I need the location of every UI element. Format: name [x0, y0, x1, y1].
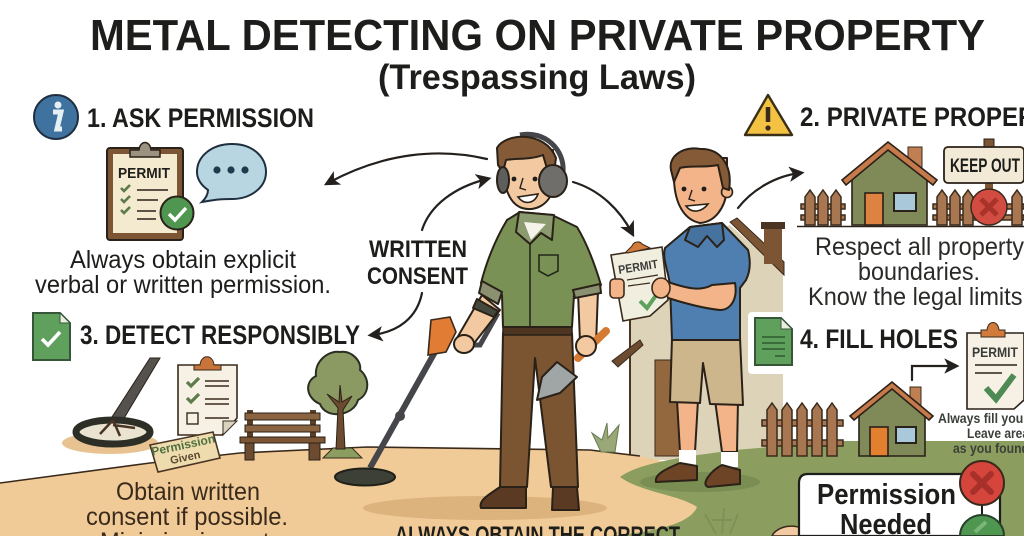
cuff right: [573, 284, 601, 298]
panel: detect responsibly: [33, 313, 367, 536]
icon: permit clipboard: PERMIT: [118, 165, 170, 182]
heading 3: 3. DETECT RESPONSIBLY: [80, 320, 360, 350]
small note text: [938, 411, 1024, 456]
cuff left: [479, 281, 502, 304]
subtitle: (Trespassing Laws): [378, 58, 696, 97]
center callout: written consent: WRITTEN: [369, 236, 467, 263]
stamp: permission given: Permission: [150, 432, 216, 459]
shorts: [670, 338, 743, 405]
icon: green document: [755, 318, 792, 365]
bench: [240, 410, 325, 460]
wristband: [473, 299, 498, 317]
legs: [677, 400, 698, 452]
arm holding detector: [457, 295, 500, 346]
head: [671, 148, 732, 223]
panel: ask permission: [34, 95, 331, 299]
sign: keep out: [944, 139, 1024, 191]
belt: [503, 326, 572, 335]
collar: [516, 212, 554, 244]
ground: grass: [610, 441, 1024, 536]
icon: speech bubble: [197, 144, 266, 202]
arrow to permit: [912, 366, 955, 380]
ground outline: [0, 447, 640, 483]
house: [850, 382, 933, 456]
permit sheet: PERMIT: [972, 344, 1018, 360]
permit clipboard: PERMIT: [617, 257, 660, 277]
text block 3: [86, 478, 288, 536]
stamp: permission given: [150, 432, 220, 472]
ground shadow: [363, 496, 607, 520]
connector line: [981, 505, 983, 516]
fence right: [933, 190, 1024, 225]
ground line: [797, 226, 1024, 228]
fence: [762, 403, 843, 456]
grass tuft: [592, 423, 619, 452]
trowel: [537, 331, 606, 400]
background house: [630, 218, 808, 460]
hand: [454, 335, 474, 353]
checklist document: [178, 357, 237, 435]
icon: permit clipboard: [107, 142, 194, 240]
icon: green check circle: [960, 515, 1004, 536]
head: [497, 134, 567, 209]
text block 2: boundaries.: [858, 258, 980, 286]
stamp: permission given: Given: [169, 449, 202, 467]
text block 2: [808, 233, 1024, 311]
icon: info: [34, 95, 78, 139]
figure: detectorist: [335, 134, 606, 510]
pants: [500, 333, 578, 487]
icon: red X circle: [960, 461, 1004, 505]
fence left: [801, 190, 845, 225]
callout: permission needed: [799, 474, 1000, 536]
arm holding trowel: [578, 290, 598, 345]
arrow: to ask permission: [328, 153, 487, 183]
shirt details: [530, 240, 558, 326]
hand: [772, 526, 810, 536]
permit sheet: [967, 322, 1024, 409]
panel: private property: [745, 95, 1024, 311]
icon: warning triangle: [745, 95, 792, 135]
text block 1: verbal or written permission.: [35, 271, 331, 299]
text block 3: consent if possible.: [86, 503, 288, 531]
figure: landowner: [610, 148, 750, 487]
arrow: to detector's head: [422, 179, 487, 230]
center callout: written consent: [367, 236, 468, 290]
icon: red X: [971, 189, 1007, 225]
folded arm: [662, 280, 736, 310]
boots: [481, 487, 579, 510]
center callout: written consent: CONSENT: [367, 263, 468, 290]
text block 1: Always obtain explicit: [70, 246, 296, 274]
tree: [308, 352, 367, 458]
stick: [612, 340, 643, 367]
ground: sandy path: [0, 447, 700, 536]
hand: [576, 336, 596, 356]
shoes: [656, 463, 740, 487]
left hand: [610, 279, 624, 298]
shirt: [481, 212, 601, 327]
arrow: to detect responsibly: [372, 293, 422, 335]
detector coil illustration: [62, 358, 160, 454]
metal detector: [335, 313, 498, 486]
socks: [679, 450, 738, 467]
icon: green check document: [33, 313, 70, 360]
text block 1: [35, 246, 331, 299]
panel: fill holes: [755, 318, 1024, 536]
arrow: to private property: [738, 173, 800, 208]
heading 4: 4. FILL HOLES: [800, 324, 958, 354]
title: METAL DETECTING ON PRIVATE PROPERTY: [90, 11, 985, 60]
right hand: [652, 278, 670, 298]
collar: [685, 223, 724, 247]
house: [842, 142, 937, 225]
permit clipboard: [611, 242, 668, 321]
text block 3: Obtain written: [116, 478, 260, 506]
callout: permission needed: Permission: [817, 479, 956, 511]
arrow: to permit clipboard: [573, 182, 632, 233]
heading 1: 1. ASK PERMISSION: [87, 103, 314, 133]
green shoe shadow: [640, 472, 760, 492]
polo shirt: [664, 223, 750, 340]
cover right of callout: [1003, 473, 1024, 536]
grass tuft lower: [705, 508, 738, 534]
